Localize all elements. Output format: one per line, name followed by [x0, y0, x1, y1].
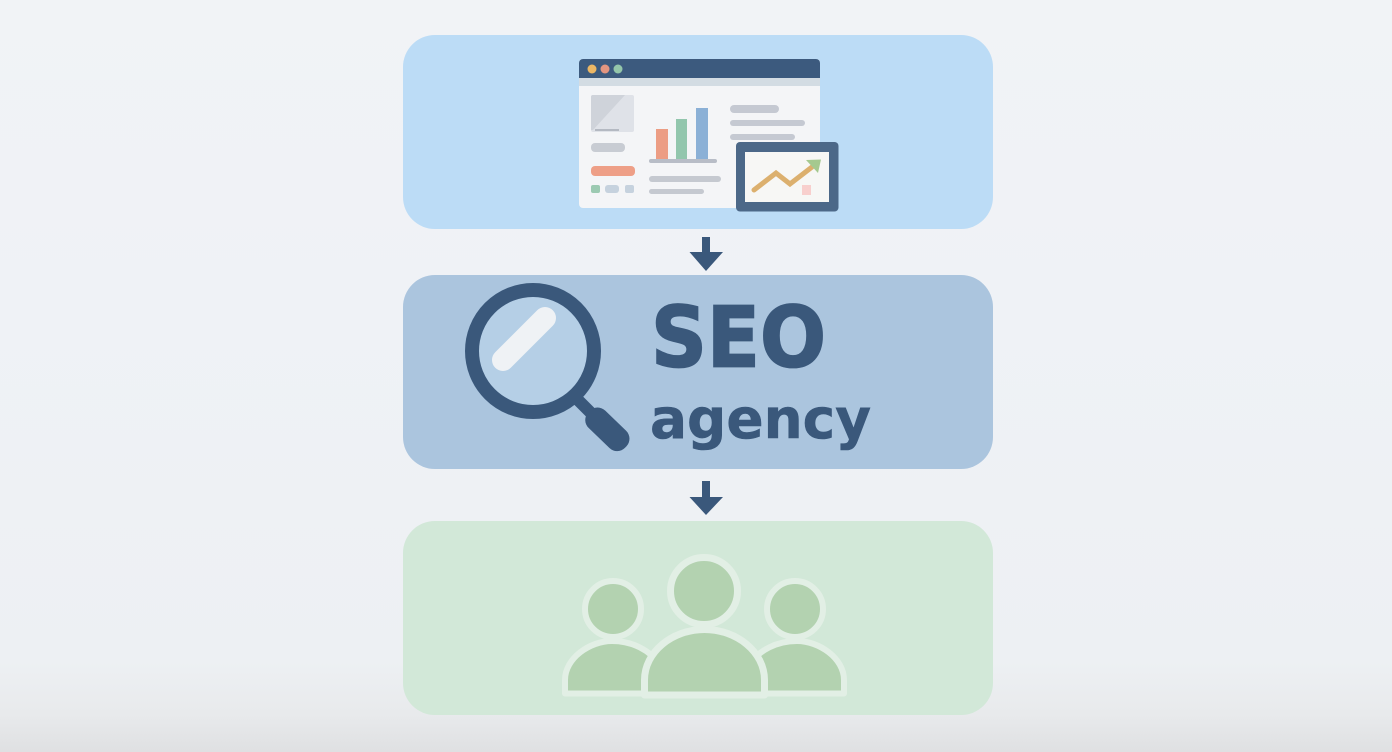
panel: website analytics — [403, 35, 993, 229]
arrow: website to SEO agency — [690, 237, 723, 271]
icon: magnifying glass — [472, 290, 634, 456]
panel: audience — [403, 521, 993, 715]
image placeholder — [591, 95, 634, 132]
heading: agency: agency — [650, 387, 871, 451]
icon: browser window — [579, 59, 820, 208]
icon: right person — [749, 581, 844, 694]
icon: center person — [644, 558, 764, 695]
arrow: SEO agency to audience — [690, 481, 723, 515]
icon: left person — [565, 581, 660, 694]
icon: tablet with trend line — [736, 142, 838, 212]
bar chart — [649, 108, 717, 163]
panel: SEO agency — [403, 275, 993, 469]
heading: SEO: SEO — [651, 288, 826, 386]
